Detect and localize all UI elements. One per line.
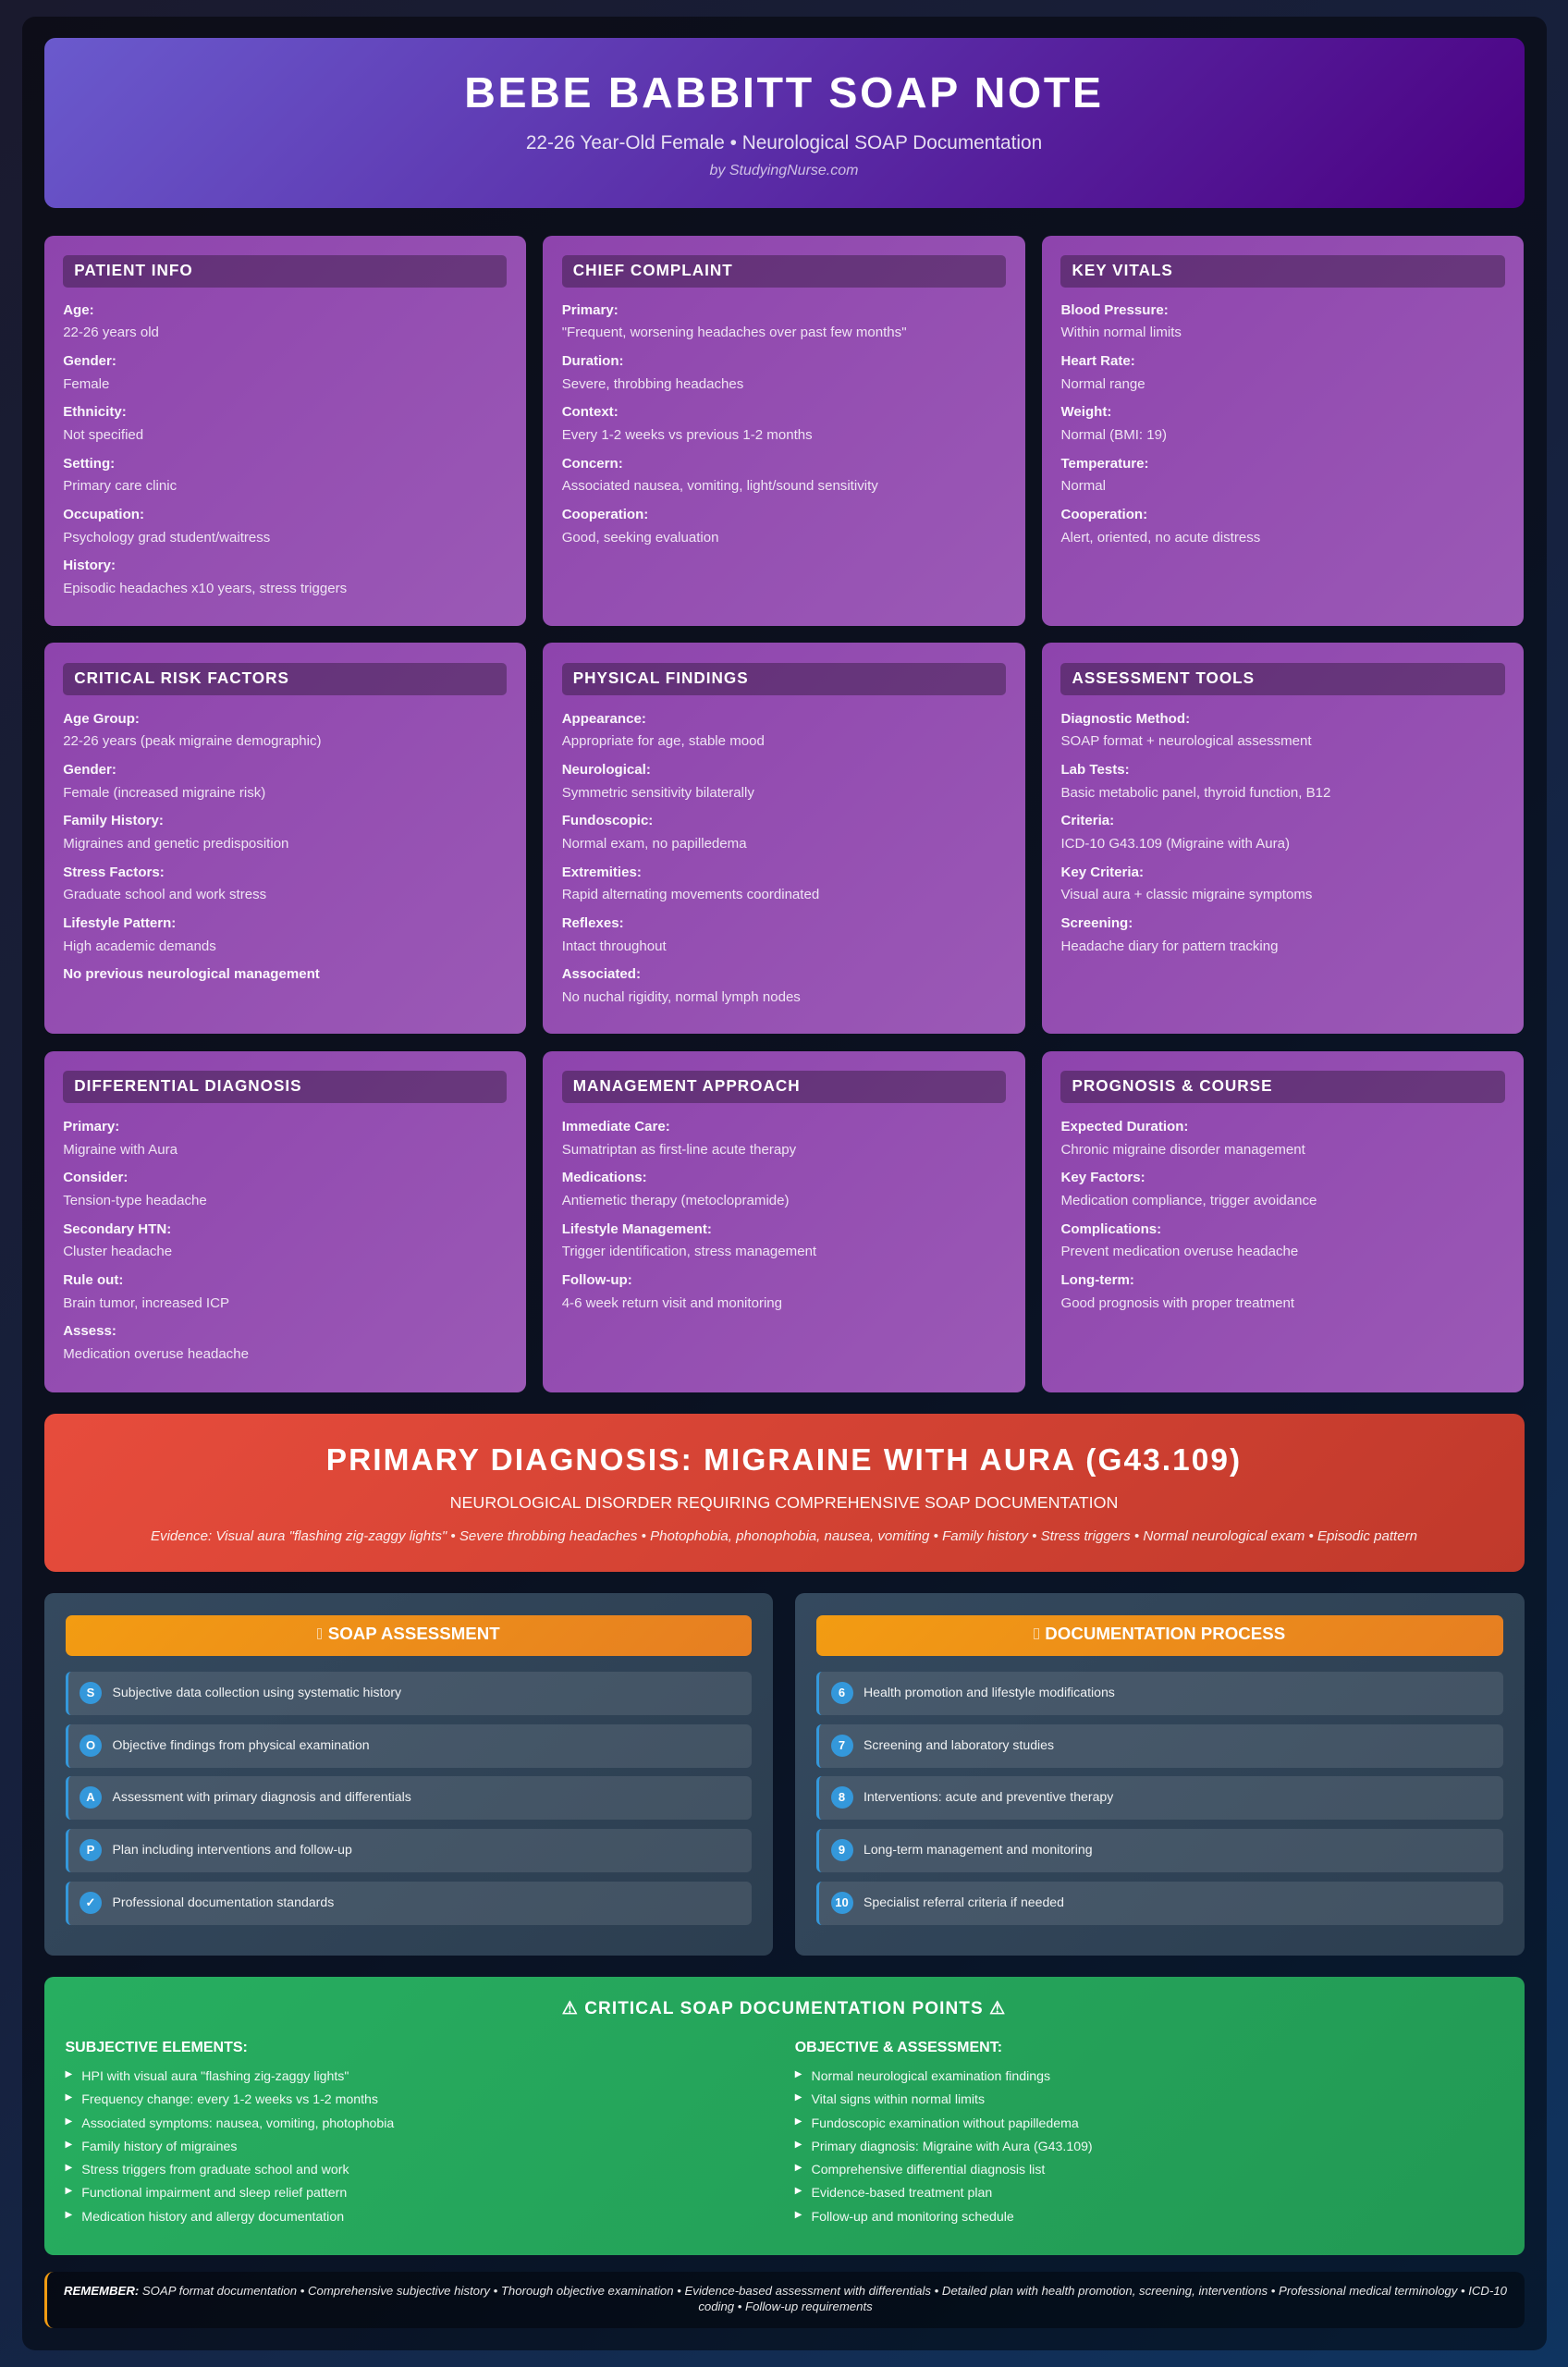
text block: key vitals fields	[1060, 302, 1260, 546]
text block: prognosis fields: Prevent medication overuse headache	[1060, 1244, 1298, 1259]
panel: prognosis and course	[1042, 1051, 1524, 1392]
heading: key vitals: KEY VITALS	[1072, 261, 1173, 279]
text block: chief complaint fields	[562, 302, 907, 546]
text block: risk factor fields: High academic demands	[63, 938, 216, 954]
list item check: Professional documentation standards	[113, 1895, 334, 1909]
panel: management approach	[543, 1051, 1024, 1392]
heading: patient info: PATIENT INFO	[74, 261, 193, 279]
subheading: diagnosis description: NEUROLOGICAL DISORDER REQUIRING COMPREHENSIVE SOAP DOCUMENTATION	[450, 1493, 1118, 1512]
heading: documentation process: DOCUMENTATION PROCESS	[1045, 1624, 1285, 1643]
text block: physical finding fields: Rapid alternating movements coordinated	[562, 887, 819, 902]
list item 7: Screening and laboratory studies	[864, 1737, 1054, 1752]
text block: prognosis fields: Chronic migraine disorder management	[1060, 1142, 1305, 1158]
text block: assessment tool fields: SOAP format + neurological assessment	[1060, 733, 1312, 749]
text block: chief complaint fields: Associated nausea, vomiting, light/sound sensitivity	[562, 478, 878, 494]
text block: key vitals fields: Cooperation:	[1060, 507, 1147, 522]
text block: risk factor fields: 22-26 years (peak migraine demographic)	[63, 733, 322, 749]
text block: prognosis fields: Expected Duration:	[1060, 1119, 1188, 1134]
list: objective and assessment: ▶	[795, 2116, 802, 2127]
list: subjective elements: ▶	[65, 2140, 72, 2150]
heading: SOAP assessment	[65, 1615, 752, 1656]
list item 6	[816, 1672, 1503, 1715]
text block: assessment tool fields: ICD-10 G43.109 (Migraine with Aura)	[1060, 836, 1290, 852]
text block: key vitals fields: Normal range	[1060, 376, 1145, 392]
text block: chief complaint fields: Good, seeking evaluation	[562, 530, 719, 546]
text block: key vitals fields: Alert, oriented, no acute distress	[1060, 530, 1260, 546]
text block: chief complaint fields: Context:	[562, 404, 619, 420]
byline: by StudyingNurse.com	[710, 163, 858, 178]
heading: prognosis and course	[1060, 1071, 1505, 1103]
text block: patient info fields: Ethnicity:	[63, 404, 127, 420]
text block: physical finding fields: Normal exam, no papilledema	[562, 836, 747, 852]
text block: assessment tool fields: Key Criteria:	[1060, 865, 1144, 880]
text block: differential fields: Tension-type headache	[63, 1193, 207, 1208]
list item A: A	[86, 1790, 95, 1804]
list item P	[65, 1829, 752, 1872]
text block: prognosis fields: Key Factors:	[1060, 1170, 1145, 1185]
text block: patient info fields: Age:	[63, 302, 94, 318]
list: objective and assessment: ▶	[795, 2210, 802, 2220]
list item 9: 9	[839, 1843, 845, 1857]
text block: management fields: Follow-up:	[562, 1272, 632, 1288]
text block: management fields: Sumatriptan as first-line acute therapy	[562, 1142, 796, 1158]
text block: chief complaint fields: Concern:	[562, 456, 623, 472]
text block: physical finding fields: Fundoscopic:	[562, 813, 653, 828]
text block: patient info fields: Episodic headaches x10 years, stress triggers	[63, 581, 347, 596]
list item 10: 10	[835, 1895, 849, 1909]
list: subjective elements: HPI with visual aura "flashing zig-zaggy lights"	[81, 2068, 349, 2083]
panel: key vitals	[1042, 235, 1524, 626]
list item A: Assessment with primary diagnosis and differentials	[113, 1789, 411, 1804]
text block: risk factor fields: Stress Factors:	[63, 865, 165, 880]
text block: prognosis fields: Good prognosis with proper treatment	[1060, 1295, 1294, 1311]
text block: key vitals fields: Weight:	[1060, 404, 1111, 420]
list: subjective elements: Functional impairment and sleep relief pattern	[81, 2185, 347, 2200]
text block: differential fields: Consider:	[63, 1170, 128, 1185]
list item S: S	[87, 1686, 94, 1699]
text block: risk factor fields: Graduate school and work stress	[63, 887, 266, 902]
list item check: ✓	[86, 1895, 95, 1909]
text block: key vitals fields: Normal (BMI: 19)	[1060, 427, 1167, 443]
text block: risk factor fields: Female (increased migraine risk)	[63, 785, 265, 801]
heading: key vitals	[1060, 255, 1505, 288]
list item O: O	[86, 1738, 95, 1752]
list item 7: 7	[839, 1738, 845, 1752]
list item 6: Health promotion and lifestyle modifications	[864, 1685, 1115, 1699]
heading: physical findings: PHYSICAL FINDINGS	[573, 668, 749, 687]
list item 6: 6	[839, 1686, 845, 1699]
panel: physical findings	[543, 643, 1024, 1034]
heading: patient info	[63, 255, 507, 288]
list item S: Subjective data collection using systematic history	[113, 1685, 401, 1699]
list item 10: Specialist referral criteria if needed	[864, 1895, 1064, 1909]
text block: key vitals fields: Blood Pressure:	[1060, 302, 1169, 318]
list: subjective elements: ▶	[65, 2069, 72, 2079]
text block: differential fields: Rule out:	[63, 1272, 123, 1288]
text block: risk factor fields: Age Group:	[63, 711, 140, 727]
text block: physical finding fields: Intact throughout	[562, 938, 667, 954]
list: subjective elements: ▶	[65, 2210, 72, 2220]
list item 8: 8	[839, 1790, 845, 1804]
text block: physical finding fields: Neurological:	[562, 762, 651, 778]
text block: differential fields	[63, 1119, 249, 1362]
text block: evidence: Evidence: Visual aura "flashing zig-zaggy lights" • Severe throbbing headaches • Photophobia, phonophobia, nausea, vomiting • Family history • Stress triggers • Normal neurological exam • Episodic pattern	[151, 1528, 1417, 1544]
list: objective and assessment: Fundoscopic examination without papilledema	[811, 2116, 1079, 2130]
callout: remember: REMEMBER: SOAP format documentation • Comprehensive subjective history • Thorough objective examination • Evidence-based assessment with differentials • Detailed plan with health promotion, screening, interventions • Professional medical terminology • ICD-10	[64, 2284, 1507, 2298]
text block: patient info fields: Not specified	[63, 427, 143, 443]
text block: patient info fields: 22-26 years old	[63, 325, 159, 340]
text block: patient info fields	[63, 302, 347, 596]
text block: risk factor fields: No previous neurological management	[63, 966, 320, 982]
text block: differential fields: Medication overuse headache	[63, 1346, 249, 1362]
text block: chief complaint fields: Primary:	[562, 302, 619, 318]
text block: patient info fields: History:	[63, 558, 116, 573]
list: objective and assessment: Comprehensive differential diagnosis list	[811, 2162, 1045, 2177]
heading: management approach: MANAGEMENT APPROACH	[573, 1076, 801, 1095]
text block: physical finding fields: Appearance:	[562, 711, 646, 727]
text block: risk factor fields: Lifestyle Pattern:	[63, 915, 176, 931]
text block: differential fields: Primary:	[63, 1119, 119, 1134]
heading: management approach	[562, 1071, 1006, 1103]
subheading: objective and assessment: OBJECTIVE & ASSESSMENT:	[795, 2040, 1002, 2054]
text block: differential fields: Secondary HTN:	[63, 1221, 171, 1237]
list: objective and assessment: ▶	[795, 2069, 802, 2079]
text block: patient info fields: Primary care clinic	[63, 478, 177, 494]
text block: physical finding fields: Symmetric sensitivity bilaterally	[562, 785, 754, 801]
heading: prognosis and course: PROGNOSIS & COURSE	[1072, 1076, 1273, 1095]
text block: assessment tool fields: Visual aura + classic migraine symptoms	[1060, 887, 1312, 902]
panel: differential diagnosis	[44, 1051, 526, 1392]
text block: physical finding fields: Appropriate for age, stable mood	[562, 733, 765, 749]
heading: chief complaint	[562, 255, 1006, 288]
list: subjective elements: ▶	[65, 2092, 72, 2103]
list: subjective elements: ▶	[65, 2163, 72, 2173]
panel: SOAP assessment	[44, 1593, 773, 1956]
text block: risk factor fields: Migraines and genetic predisposition	[63, 836, 288, 852]
heading: documentation process	[816, 1615, 1503, 1656]
heading: assessment tools	[1060, 663, 1505, 695]
list: subjective elements: Family history of migraines	[81, 2139, 237, 2153]
panel: critical SOAP documentation points	[44, 1977, 1524, 2255]
subtitle: 22-26 Year-Old Female • Neurological SOAP Documentation	[526, 132, 1042, 153]
text block: differential fields: Migraine with Aura	[63, 1142, 178, 1158]
list: objective and assessment: Vital signs within normal limits	[811, 2091, 985, 2106]
list item P: Plan including interventions and follow-up	[113, 1842, 352, 1857]
list: subjective elements: Associated symptoms: nausea, vomiting, photophobia	[81, 2116, 394, 2130]
panel: documentation process	[795, 1593, 1524, 1956]
text block: assessment tool fields: Basic metabolic panel, thyroid function, B12	[1060, 785, 1330, 801]
text block: risk factor fields: Gender:	[63, 762, 116, 778]
heading: physical findings	[562, 663, 1006, 695]
list: subjective elements: ▶	[65, 2116, 72, 2127]
text block: assessment tool fields: Lab Tests:	[1060, 762, 1130, 778]
list: subjective elements: Stress triggers from graduate school and work	[81, 2162, 349, 2177]
title: BEBE BABBITT SOAP NOTE	[464, 68, 1104, 117]
list: objective and assessment: Follow-up and monitoring schedule	[811, 2209, 1014, 2224]
list item 7	[816, 1724, 1503, 1768]
text block: key vitals fields: Normal	[1060, 478, 1106, 494]
text block: key vitals fields: Heart Rate:	[1060, 353, 1135, 369]
text block: management fields: 4-6 week return visit and monitoring	[562, 1295, 782, 1311]
list item O: Objective findings from physical examination	[113, 1737, 370, 1752]
heading: SOAP assessment: SOAP ASSESSMENT	[328, 1624, 500, 1643]
text block: chief complaint fields: Duration:	[562, 353, 624, 369]
text block: patient info fields: Female	[63, 376, 109, 392]
text block: physical finding fields: Reflexes:	[562, 915, 624, 931]
heading: critical points: ⚠ CRITICAL SOAP DOCUMENTATION POINTS ⚠	[562, 1999, 1006, 2018]
list: subjective elements: Frequency change: every 1-2 weeks vs 1-2 months	[81, 2091, 378, 2106]
list: subjective elements	[65, 2068, 394, 2224]
list: objective and assessment: ▶	[795, 2186, 802, 2196]
title banner	[44, 38, 1524, 207]
text block: differential fields: Cluster headache	[63, 1244, 172, 1259]
list item 9	[816, 1829, 1503, 1872]
list item O	[65, 1724, 752, 1768]
list: objective and assessment	[795, 2068, 1093, 2224]
text block: assessment tool fields: Criteria:	[1060, 813, 1114, 828]
text block: key vitals fields: Within normal limits	[1060, 325, 1182, 340]
text block: patient info fields: Setting:	[63, 456, 115, 472]
panel: primary diagnosis banner	[44, 1414, 1524, 1572]
list: subjective elements: Medication history and allergy documentation	[81, 2209, 344, 2224]
list: objective and assessment: Evidence-based treatment plan	[811, 2185, 992, 2200]
list item A	[65, 1776, 752, 1820]
heading: differential diagnosis: DIFFERENTIAL DIAGNOSIS	[74, 1076, 302, 1095]
text block: management fields: Antiemetic therapy (metoclopramide)	[562, 1193, 790, 1208]
list item P: P	[87, 1843, 94, 1857]
text block: risk factor fields: Family History:	[63, 813, 164, 828]
list: objective and assessment: Primary diagnosis: Migraine with Aura (G43.109)	[811, 2139, 1093, 2153]
heading: critical risk factors: CRITICAL RISK FACTORS	[74, 668, 289, 687]
text block: management fields: Medications:	[562, 1170, 647, 1185]
list item 8: Interventions: acute and preventive therapy	[864, 1789, 1113, 1804]
text block: patient info fields: Psychology grad student/waitress	[63, 530, 270, 546]
heading: chief complaint: CHIEF COMPLAINT	[573, 261, 733, 279]
text block: key vitals fields: Temperature:	[1060, 456, 1149, 472]
text block: chief complaint fields: Severe, throbbing headaches	[562, 376, 743, 392]
text block: prognosis fields: Medication compliance, trigger avoidance	[1060, 1193, 1317, 1208]
text block: management fields: Lifestyle Management:	[562, 1221, 712, 1237]
text block: chief complaint fields: "Frequent, worsening headaches over past few months"	[562, 325, 907, 340]
heading: differential diagnosis	[63, 1071, 507, 1103]
list item S	[65, 1672, 752, 1715]
panel: assessment tools	[1042, 643, 1524, 1034]
text block: physical finding fields: Associated:	[562, 966, 641, 982]
text block: assessment tool fields: Headache diary for pattern tracking	[1060, 938, 1279, 954]
list item 8	[816, 1776, 1503, 1820]
text block: prognosis fields: Long-term:	[1060, 1272, 1134, 1288]
list: objective and assessment: Normal neurological examination findings	[811, 2068, 1050, 2083]
text block: assessment tool fields	[1060, 711, 1330, 954]
text block: patient info fields: Occupation:	[63, 507, 144, 522]
text block: assessment tool fields: Diagnostic Method:	[1060, 711, 1190, 727]
text block: management fields: Immediate Care:	[562, 1119, 670, 1134]
subheading: subjective elements: SUBJECTIVE ELEMENTS:	[65, 2040, 248, 2054]
heading: assessment tools: ASSESSMENT TOOLS	[1072, 668, 1255, 687]
heading: primary diagnosis: PRIMARY DIAGNOSIS: MIGRAINE WITH AURA (G43.109)	[326, 1443, 1242, 1478]
text block: management fields: Trigger identification, stress management	[562, 1244, 816, 1259]
text block: prognosis fields	[1060, 1119, 1317, 1311]
text block: physical finding fields: No nuchal rigidity, normal lymph nodes	[562, 989, 801, 1005]
list item 10	[816, 1882, 1503, 1925]
text block: patient info fields: Gender:	[63, 353, 116, 369]
callout: remember: coding • Follow-up requirements	[698, 2300, 873, 2313]
list: subjective elements: ▶	[65, 2186, 72, 2196]
text block: differential fields: Brain tumor, increased ICP	[63, 1295, 229, 1311]
text block: risk factor fields	[63, 711, 322, 982]
panel: patient info	[44, 235, 526, 626]
text block: chief complaint fields: Every 1-2 weeks vs previous 1-2 months	[562, 427, 813, 443]
list: objective and assessment: ▶	[795, 2092, 802, 2103]
text block: chief complaint fields: Cooperation:	[562, 507, 648, 522]
panel: critical risk factors	[44, 643, 526, 1034]
list item 9: Long-term management and monitoring	[864, 1842, 1093, 1857]
text block: assessment tool fields: Screening:	[1060, 915, 1133, 931]
heading: critical risk factors	[63, 663, 507, 695]
text block: physical finding fields: Extremities:	[562, 865, 642, 880]
callout: remember	[44, 2272, 1524, 2328]
list: objective and assessment: ▶	[795, 2140, 802, 2150]
text block: prognosis fields: Complications:	[1060, 1221, 1161, 1237]
text block: management fields	[562, 1119, 816, 1311]
text block: physical finding fields	[562, 711, 819, 1005]
panel: chief complaint	[543, 235, 1024, 626]
list: objective and assessment: ▶	[795, 2163, 802, 2173]
list item check	[65, 1882, 752, 1925]
text block: differential fields: Assess:	[63, 1323, 116, 1339]
